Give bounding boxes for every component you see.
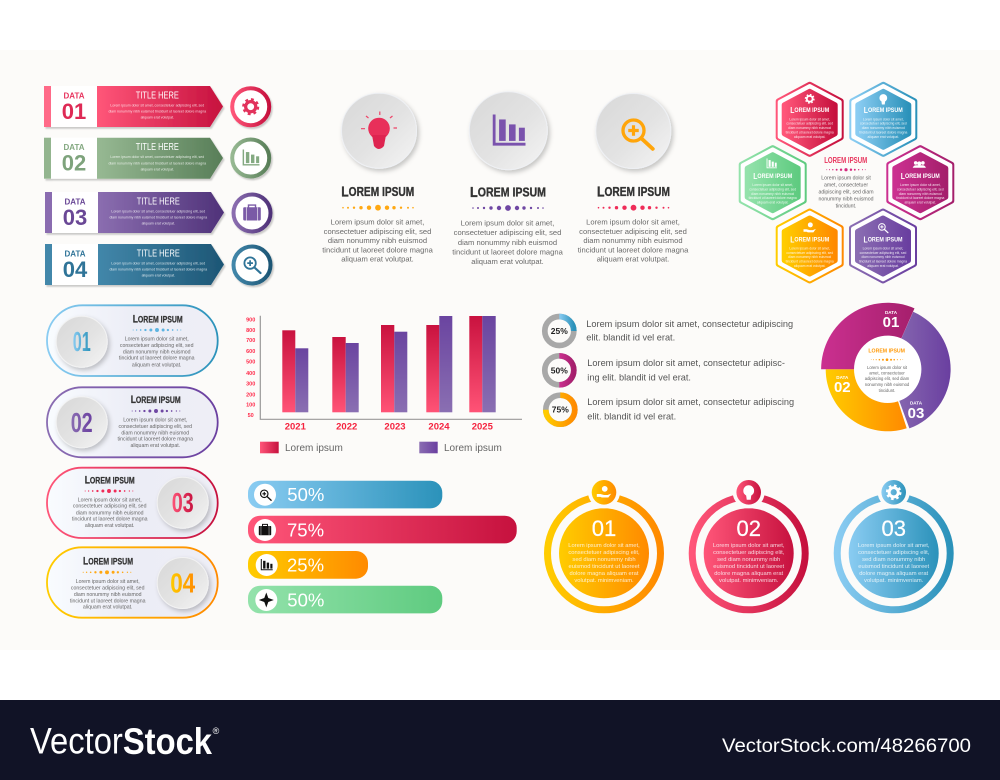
pill 01: diam nonummy nibh euismod [123,349,191,355]
hexagon: orange: consectetuer adipiscing elit, sed [786,251,833,255]
row 25%: Lorem ipsum dolor sit amet, consectetur adipiscing [586,319,793,329]
hexagon: red: LOREM IPSUM [790,105,830,115]
pill 02: 02 [71,407,93,438]
ribbon 04: aliquam erat volutpat. [142,274,175,278]
hexagon: green: diam nonummy nibh euismod [751,192,794,196]
feature: bar chart: LOREM IPSUM [470,184,546,201]
pill 04: consectetuer adipiscing elit, sed [71,585,145,591]
pill 01: 01 [73,326,91,357]
ribbon 04: Lorem ipsum dolor sit amet, consectetuer adipiscing elit, sed [111,262,205,266]
ribbon 01: Lorem ipsum dolor sit amet, consectetuer adipiscing elit, sed [110,104,204,108]
ribbon 02: DATA [63,143,85,152]
feature: magnifier: consectetuer adipiscing elit, sed [579,227,687,236]
segment 01 magenta [821,303,914,369]
circle card 01: sed diam nonummy nibh [572,557,636,563]
hexagon: purple [852,212,914,280]
pill 02 [47,387,218,457]
feature: bar chart: consectetuer adipiscing elit, sed [454,228,561,237]
ribbon 04: DATA [64,250,86,258]
pill 01: LOREM IPSUM [133,313,183,325]
hexagon: red: tincidunt ut laoreet dolore magna [786,130,834,134]
panel: progress bars [248,481,517,613]
donut labels: DATA [885,310,898,315]
feature: bar chart: tincidunt ut laoreet dolore magna [452,248,564,256]
pill 03: consectetuer adipiscing elit, sed [73,504,147,510]
hexagon: green: aliquam erat volutpat. [757,201,789,205]
ribbon 04 [45,244,224,285]
donut labels [834,310,924,422]
row 25%: elit. blandit id vel erat. [586,333,675,343]
ribbon 03: diam nonummy nibh euismod tincidunt ut laoreet dolore magna [109,216,207,220]
pill 03 [47,468,218,538]
y axis labels [246,318,255,419]
legend [260,442,502,454]
bar 25% orange: 25% [287,554,324,576]
donut labels: 02 [834,379,851,396]
feature: bar chart: Lorem ipsum dolor sit amet, [461,218,554,228]
pill 03: aliquam erat volutpat. [85,523,135,529]
ribbon 02: TITLE HERE [136,142,179,153]
circle card 03: consectetuer adipiscing elit, [858,550,930,556]
x axis years: 2025 [472,422,494,432]
hexagon: green: tincidunt ut laoreet dolore magna [749,196,797,200]
pill 03: tincidunt ut laoreet dolore magna [72,517,148,523]
hexagon: red: Lorem ipsum dolor sit amet, [789,117,830,121]
y axis labels: 900 [246,318,255,324]
hexagon: blue: tincidunt ut laoreet dolore magna [859,130,907,134]
segment 02 orange [826,369,907,431]
pill 01: aliquam erat volutpat. [132,362,182,368]
ribbon 03: Lorem ipsum dolor sit amet, consectetuer adipiscing elit, sed [111,210,205,214]
pill 04 [47,547,218,618]
x axis years: 2022 [336,422,357,432]
y axis labels: 500 [246,359,255,365]
pill 01: consectetuer adipiscing elit, sed [120,343,194,349]
feature: magnifier: Lorem ipsum dolor sit amet, [586,218,680,226]
y axis labels: 400 [246,371,255,377]
donut centre text: LOREM IPSUM [868,349,905,355]
hexagon: orange: diam nonummy nibh euismod [788,255,831,259]
pill 04: LOREM IPSUM [83,555,133,567]
y axis labels: 600 [246,349,255,355]
y axis labels: 200 [246,392,255,398]
row 50%: 50% [551,365,568,375]
pill 03: LOREM IPSUM [85,474,135,486]
circle card 01: Lorem ipsum dolor sit amet, [568,543,640,549]
y axis labels: 300 [246,381,255,387]
panel: hexagon cluster [742,85,951,280]
ribbon 01: 01 [62,99,86,124]
hexagon: green: Lorem ipsum dolor sit amet, [752,183,793,187]
circle card 02: consectetuer adipiscing elit, [713,550,785,556]
donut labels: 01 [883,314,899,331]
icon: magnifier badge [234,246,270,284]
pill 02: Lorem ipsum dolor sit amet, [123,418,187,424]
hexagon centre text: Lorem ipsum dolor sit [821,176,871,182]
legend: Lorem ipsum [285,443,343,454]
hexagon: orange: LOREM IPSUM [790,234,830,244]
icon: gear badge [232,88,269,125]
footer registered mark: ® [213,726,220,736]
bar 50% green: 50% [287,590,324,610]
hexagon: red [779,85,841,154]
feature: bar chart: diam nonummy nibh euismod [458,238,557,247]
donut centre text: amet, consectetuer [869,370,905,376]
ribbon 01: aliquam erat volutpat. [141,116,174,120]
row 25% [545,316,793,346]
circle card 03 [837,476,950,610]
hexagon: magenta: aliquam erat volutpat. [905,201,936,205]
ribbon 01: diam nonummy nibh euismod tincidunt ut laoreet dolore magna [108,110,206,114]
circle card 03: volutpat. minimveniam. [864,578,924,584]
hexagon: purple: diam nonummy nibh euismod [861,255,905,259]
bar 75% red: 75% [287,520,324,540]
feature: bulb: consectetuer adipiscing elit, sed [324,227,431,236]
feature: bulb [322,93,434,264]
pill 04: 04 [170,568,196,598]
ribbon icons column [232,88,270,284]
pill 03: diam nonummy nibh euismod [76,510,144,516]
feature: magnifier [578,94,689,264]
ribbon 04: 04 [63,257,88,282]
ribbon 04: diam nonummy nibh euismod tincidunt ut laoreet dolore magna [109,268,207,272]
footer logo: VectorStock [30,720,212,762]
pill 04: aliquam erat volutpat. [83,605,133,611]
bar 50% blue [248,481,442,508]
circle card 02: Lorem ipsum dolor sit amet, [713,543,785,549]
hexagon: blue: Lorem ipsum dolor sit amet, [863,117,904,121]
hexagon: orange: aliquam erat volutpat. [794,264,826,268]
hexagon: magenta: consectetuer adipiscing elit, sed [897,187,944,191]
hexagon centre text: LOREM IPSUM [824,156,867,165]
hexagon: blue: aliquam erat volutpat. [868,135,899,139]
hexagon: green [742,148,804,217]
panel: three button features [322,92,689,266]
hexagon: purple: LOREM IPSUM [864,234,903,244]
hexagon centre text: nonummy nibh euismod [818,197,874,203]
page background panel [0,50,1000,650]
circle card 01 [548,476,660,610]
hexagon: magenta: LOREM IPSUM [901,171,940,181]
donut centre text: adipiscing elit, sed diam [865,376,910,381]
feature: bulb: Lorem ipsum dolor sit amet, [331,218,424,226]
pill 01: Lorem ipsum dolor sit amet, [125,337,189,343]
hexagon centre text: adipiscing elit, sed diam [818,190,874,196]
ribbon 01: TITLE HERE [136,90,179,102]
hexagon: purple: consectetuer adipiscing elit, sed [860,251,907,255]
pill 02: tincidunt ut laoreet dolore magna [118,437,193,443]
hexagon: blue: LOREM IPSUM [864,105,903,115]
hexagon: red: aliquam erat volutpat. [794,135,826,139]
bar 50% green [248,586,442,613]
circle card 02: dolore magna aliquam erat [714,571,784,577]
hexagon: blue: diam nonummy nibh euismod [862,126,905,130]
ribbon 03: DATA [64,198,86,206]
ribbon 03: 03 [63,205,87,230]
hexagon: purple: aliquam erat volutpat. [867,264,899,268]
ribbon 03: TITLE HERE [137,196,180,208]
row 50% [545,356,785,385]
hexagon centre text: tincidunt. [836,204,856,210]
bars [282,316,496,412]
row 25%: 25% [551,326,568,336]
x axis years [285,422,494,432]
hexagon: orange: Lorem ipsum dolor sit amet, [789,246,830,250]
ribbon 02: 02 [62,150,86,176]
donut labels: DATA [836,375,849,380]
row 75%: 75% [552,405,569,415]
hexagon: orange: tincidunt ut laoreet dolore magna [786,260,834,264]
pill 02: aliquam erat volutpat. [130,443,180,449]
hexagon: purple: tincidunt ut laoreet dolore magna [859,260,907,264]
x axis years: 2021 [285,422,307,432]
ribbon 02: Lorem ipsum dolor sit amet, consectetuer adipiscing elit, sed [110,155,204,159]
y axis labels: 50 [248,413,254,419]
circle card 03: 03 [881,516,906,541]
feature: bulb: LOREM IPSUM [341,184,414,200]
hexagon: blue [852,85,914,154]
pill 01 [47,305,218,376]
hexagon: magenta: Lorem ipsum dolor sit amet, [900,183,941,187]
row 50%: Lorem ipsum dolor sit amet, consectetur adipisc- [587,358,785,368]
pill 03: 03 [172,487,194,518]
donut centre text: Lorem ipsum dolor sit [867,365,908,370]
circle card 03: euismod tincidunt ut laoreet [858,564,930,570]
feature: bar chart: aliquam erat volutpat. [471,257,544,266]
donut chart [821,303,951,431]
x axis years: 2023 [384,422,406,432]
bar chart [246,316,522,454]
ribbon 03 [45,192,224,233]
hexagon: red: consectetuer adipiscing elit, sed [786,122,833,126]
feature: magnifier: LOREM IPSUM [597,184,670,200]
x axis years: 2024 [428,422,450,432]
feature: magnifier: aliquam erat volutpat. [597,254,669,264]
panel: circle cards [548,476,950,610]
hexagon: blue: consectetuer adipiscing elit, sed [860,122,907,126]
legend: Lorem ipsum [444,443,502,454]
y axis labels: 800 [246,328,255,334]
circle card 03: sed diam nonummy nibh [862,557,925,563]
ribbon 01 [44,86,223,127]
circle card 01: euismod tincidunt ut laoreet [569,564,640,570]
row 50%: ing elit. blandit id vel erat. [587,372,691,382]
pill 02: consectetuer adipiscing elit, sed [119,424,192,430]
donut centre text: tincidunt. [879,388,895,393]
hexagon: orange [779,212,841,280]
donut labels: DATA [910,400,923,406]
footer band [0,700,1000,780]
circle card 01: dolore magna aliquam erat [570,571,639,577]
footer url: VectorStock.com/48266700 [722,735,971,757]
pill 02: diam nonummy nibh euismod [121,430,189,436]
segment 03 purple [888,312,951,428]
pill 03: Lorem ipsum dolor sit amet, [78,497,142,503]
circle card 03: dolore magna aliquam erat [859,571,929,577]
circle card 02: sed diam nonummy nibh [717,557,780,563]
circle card 01: volutpat. minimveniam. [574,578,634,584]
ribbon 02: aliquam erat volutpat. [141,167,174,171]
row 75% [546,395,794,424]
bar 50% blue: 50% [287,484,324,505]
bar 25% orange [248,551,368,579]
y axis labels: 100 [246,402,255,408]
feature: magnifier: diam nonummy nibh euismod [583,236,683,245]
hexagon centre text: amet, consectetuer [824,183,868,189]
ribbon 01: DATA [63,92,85,100]
ribbon 02 [44,138,223,179]
hexagon: red: diam nonummy nibh euismod [788,126,831,130]
panel: numbered arrow ribbons [44,86,224,285]
circle card 01: consectetuer adipiscing elit, [568,550,640,556]
hexagon: purple: Lorem ipsum dolor sit amet, [863,246,903,250]
hexagon: magenta: diam nonummy nibh euismod [899,192,942,196]
circle card 02: euismod tincidunt ut laoreet [713,564,785,570]
donut labels: 03 [908,405,924,422]
panel: percentage rows [545,316,794,424]
circle card 02: volutpat. minimveniam. [719,578,779,584]
pill 04: Lorem ipsum dolor sit amet, [76,579,140,585]
feature: magnifier: tincidunt ut laoreet dolore magna [578,246,689,254]
hexagon: magenta: tincidunt ut laoreet dolore magna [896,196,944,200]
feature: bar chart [452,92,564,266]
circle card 02: 02 [736,516,761,541]
hexagon centre text [818,156,874,210]
pill 04: diam nonummy nibh euismod [74,592,142,598]
pill 02: LOREM IPSUM [131,394,181,406]
donut centre text [854,336,921,403]
pill 01: tincidunt ut laoreet dolore magna [119,356,195,362]
row 75%: elit. blandit id vel erat. [587,411,676,421]
pill 04: tincidunt ut laoreet dolore magna [70,598,146,604]
y axis labels: 700 [246,338,255,344]
ribbon 04: TITLE HERE [137,248,180,260]
feature: bulb: aliquam erat volutpat. [341,254,414,264]
circle card 01: 01 [592,516,616,541]
bar 75% red [248,516,517,543]
row 75%: Lorem ipsum dolor sit amet, consectetur adipiscing [587,397,794,407]
panel: numbered pills [47,305,218,618]
icon: bar chart badge [232,140,269,176]
ribbon 02: diam nonummy nibh euismod tincidunt ut laoreet dolore magna [108,161,206,165]
circle card 03: Lorem ipsum dolor sit amet, [858,543,930,549]
donut centre text: nonummy nibh euismod [865,382,910,387]
icon: briefcase badge [234,194,270,232]
feature: bulb: diam nonummy nibh euismod [328,236,427,245]
hexagon: green: LOREM IPSUM [753,171,793,181]
circle card 02 [692,476,805,610]
hexagon: magenta [889,148,951,217]
feature: bulb: tincidunt ut laoreet dolore magna [322,246,434,254]
hexagon: green: consectetuer adipiscing elit, sed [749,187,796,191]
ribbon 03: aliquam erat volutpat. [142,222,175,226]
